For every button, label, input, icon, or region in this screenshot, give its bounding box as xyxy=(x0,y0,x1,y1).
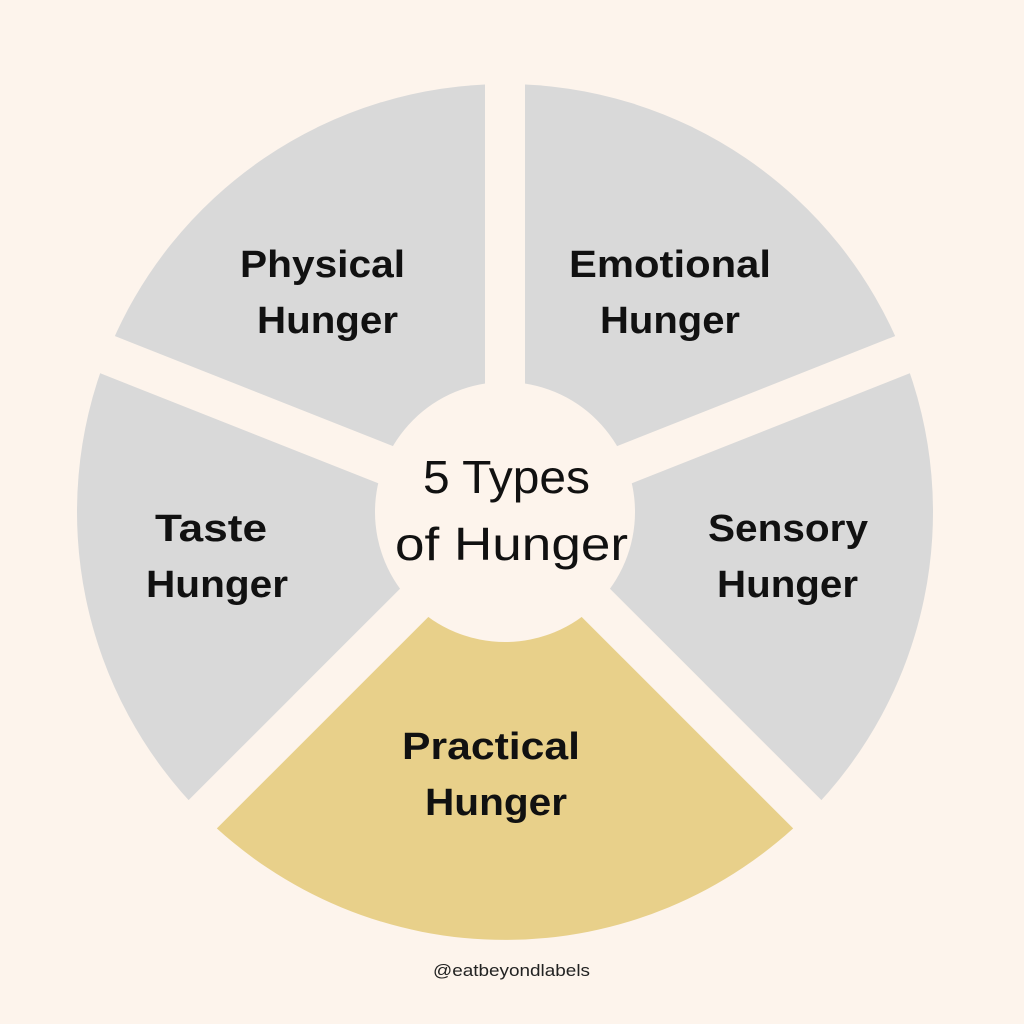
label: practical hunger: Practical xyxy=(402,726,580,768)
segment: practical hunger xyxy=(202,512,808,940)
label: sensory hunger: Sensory xyxy=(708,508,868,550)
label: taste hunger: Hunger xyxy=(146,564,288,606)
center title: of Hunger xyxy=(395,518,628,570)
segment: physical hunger xyxy=(107,84,505,512)
label: emotional hunger: Emotional xyxy=(569,244,771,286)
center circle xyxy=(375,382,635,642)
label: emotional hunger: Hunger xyxy=(600,300,740,342)
label: practical hunger: Hunger xyxy=(425,782,567,824)
wheel chart xyxy=(59,30,951,940)
segment: taste hunger xyxy=(77,354,505,815)
footer handle: @eatbeyondlabels xyxy=(433,961,590,980)
segment: sensory hunger xyxy=(505,354,933,815)
label: physical hunger: Physical xyxy=(240,244,405,286)
center title: 5 Types xyxy=(423,451,590,503)
label: taste hunger: Taste xyxy=(155,508,267,550)
label: physical hunger: Hunger xyxy=(257,300,398,342)
label: sensory hunger: Hunger xyxy=(717,564,858,606)
segment: emotional hunger xyxy=(505,84,903,512)
